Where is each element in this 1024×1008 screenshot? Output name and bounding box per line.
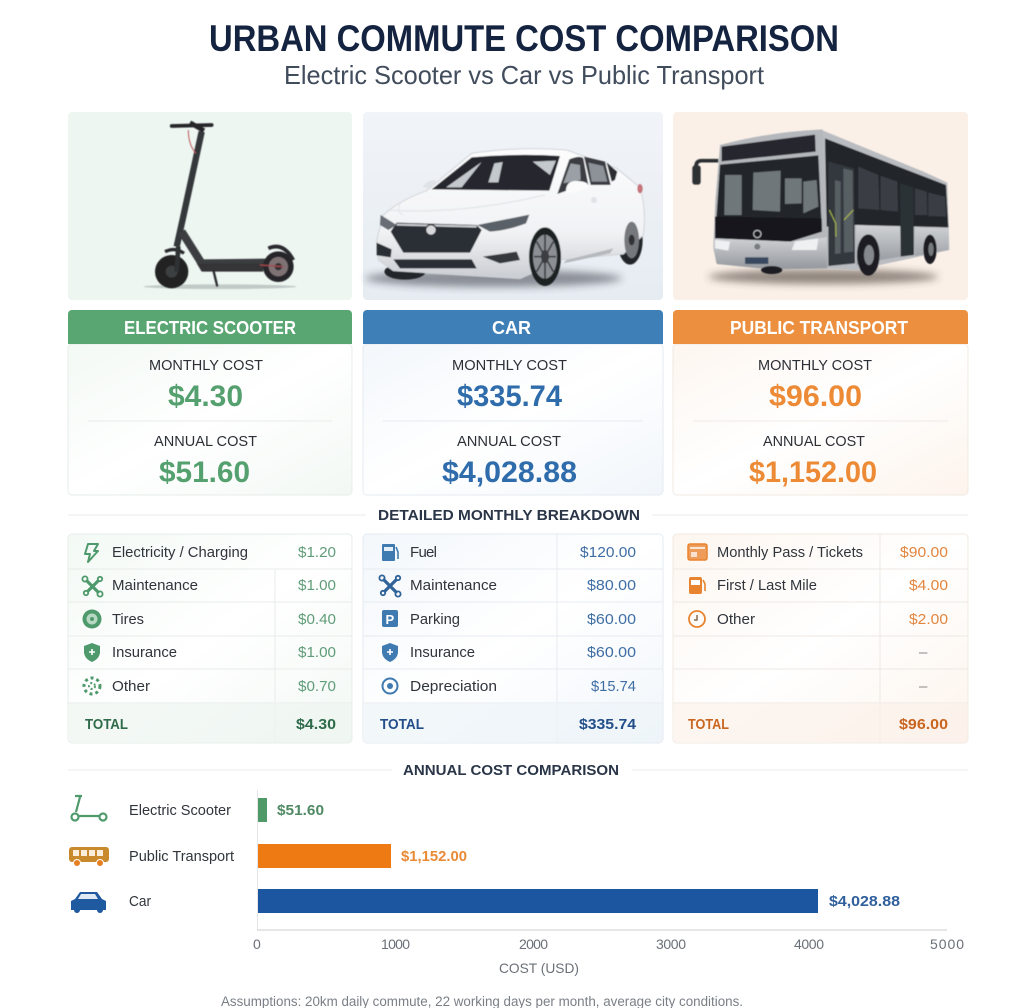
row: first last mile: First / Last Mile (717, 577, 817, 594)
bar: electric scooter (258, 798, 324, 822)
row: parking: $60.00 (587, 611, 636, 628)
car annual cost: ANNUAL COST (457, 433, 561, 450)
icon: tire (82, 610, 102, 628)
row: depreciation (410, 678, 636, 695)
scooter annual cost: $51.60 (159, 456, 250, 489)
scooter monthly cost: MONTHLY COST (149, 357, 263, 374)
row: electricity: $1.20 (298, 544, 336, 561)
row: maintenance: Maintenance (410, 577, 497, 594)
row: total (380, 717, 636, 733)
car annual cost (442, 433, 577, 489)
icon: fuel pump (382, 544, 398, 561)
panel: scooter photo (68, 112, 352, 300)
row: tires: Tires (112, 611, 144, 628)
car header: CAR (492, 318, 531, 338)
car annual cost: $4,028.88 (442, 456, 577, 489)
row: insurance (410, 644, 636, 661)
panel: scooter breakdown table (68, 534, 352, 743)
icon: car (71, 892, 106, 913)
row: total (688, 717, 948, 733)
bar: public transport (258, 844, 467, 868)
panel: car cost card (363, 310, 663, 495)
axis tick labels (253, 936, 964, 952)
subtitle: Electric Scooter vs Car vs Public Transport (284, 60, 765, 90)
label: electric scooter: Electric Scooter (129, 802, 231, 819)
public transport annual cost: ANNUAL COST (763, 433, 865, 450)
icon: clock (689, 611, 705, 627)
row: other: Other (112, 678, 150, 695)
row: fuel: $120.00 (580, 544, 636, 561)
icon: depreciation (382, 678, 398, 694)
icon: shield (84, 643, 100, 662)
row: first last mile (717, 577, 948, 594)
heading: annual cost comparison: ANNUAL COST COMPARISON (403, 763, 619, 779)
row: first last mile: $4.00 (909, 577, 948, 594)
scooter annual cost (154, 433, 257, 489)
icon: tools (379, 575, 401, 597)
axis tick labels: 2000 (519, 936, 548, 952)
car monthly cost (452, 357, 567, 413)
bus body (692, 129, 949, 276)
icon: shield (382, 643, 398, 662)
axis title: COST (USD) (499, 960, 579, 976)
row: insurance: Insurance (410, 644, 475, 661)
axis tick labels: 4000 (794, 936, 824, 952)
icon: scooter (72, 796, 106, 820)
panel: car breakdown table (363, 534, 663, 743)
row: maintenance: $80.00 (587, 577, 636, 594)
row: other: $0.70 (298, 678, 336, 695)
row: tires: $0.40 (298, 611, 336, 628)
axis tick labels: 0 (253, 936, 261, 952)
row: tires (112, 611, 336, 628)
row: other (717, 611, 948, 628)
panel: scooter cost card (68, 310, 352, 495)
public transport header (673, 310, 968, 344)
public transport annual cost (749, 433, 877, 489)
row: parking (410, 611, 636, 628)
row: total (85, 717, 336, 733)
public transport monthly cost: $96.00 (769, 380, 862, 413)
row: electricity: Electricity / Charging (112, 544, 248, 561)
bar: electric scooter: $51.60 (277, 803, 324, 819)
row: monthly pass (717, 544, 948, 561)
icon: bus (69, 847, 109, 866)
label: car: Car (129, 893, 151, 910)
icon: other (84, 678, 100, 694)
row: other (112, 678, 336, 695)
row: insurance: $1.00 (298, 644, 336, 661)
row: depreciation: $15.74 (591, 678, 636, 695)
row: maintenance (410, 577, 636, 594)
row: other: Other (717, 611, 755, 628)
panel: bus photo (673, 112, 968, 300)
scooter annual cost: ANNUAL COST (154, 433, 257, 450)
icon: pass (688, 544, 707, 560)
row: insurance: $60.00 (587, 644, 636, 661)
row: other: $2.00 (909, 611, 948, 628)
row: fuel: Fuel (410, 544, 437, 561)
icon: parking: P (386, 612, 394, 627)
bar: car (258, 889, 900, 913)
axis tick labels: 1000 (381, 936, 410, 952)
icon: lightning bolt (85, 544, 98, 562)
bar: public transport: $1,152.00 (401, 849, 467, 865)
axis tick labels: 3000 (656, 936, 686, 952)
public transport monthly cost: MONTHLY COST (758, 357, 872, 374)
row: total: $335.74 (579, 717, 636, 733)
title: URBAN COMMUTE COST COMPARISON (209, 18, 839, 59)
icon: tools (82, 576, 103, 597)
heading: detailed monthly breakdown: DETAILED MONTHLY BREAKDOWN (378, 508, 640, 524)
panel: car photo (363, 112, 663, 300)
car monthly cost: $335.74 (457, 380, 562, 413)
label: public transport: Public Transport (129, 848, 235, 865)
public transport header: PUBLIC TRANSPORT (730, 318, 908, 338)
panel: public transport breakdown table (673, 534, 968, 743)
icon: parking (382, 610, 398, 627)
scooter monthly cost: $4.30 (168, 380, 243, 413)
scooter header (68, 310, 352, 344)
public transport annual cost: $1,152.00 (749, 456, 877, 489)
scooter header: ELECTRIC SCOOTER (124, 318, 296, 338)
row: total: $4.30 (296, 717, 336, 733)
row: maintenance: Maintenance (112, 577, 198, 594)
car monthly cost: MONTHLY COST (452, 357, 567, 374)
row: depreciation: Depreciation (410, 678, 497, 695)
scooter shadow (143, 284, 297, 289)
row: insurance: Insurance (112, 644, 177, 661)
row: maintenance (112, 577, 336, 594)
row: parking: Parking (410, 611, 460, 628)
empty row dash: – (919, 644, 928, 661)
row: electricity (112, 544, 336, 561)
row: total: TOTAL (85, 717, 128, 733)
bar: car: $4,028.88 (829, 894, 900, 910)
row: monthly pass: $90.00 (900, 544, 948, 561)
public transport monthly cost (758, 357, 872, 413)
car body (377, 149, 644, 286)
axis tick labels: 5000 (930, 936, 964, 952)
empty row dash: – (919, 678, 928, 695)
row: monthly pass: Monthly Pass / Tickets (717, 544, 863, 561)
chart: annual cost bars (69, 790, 964, 976)
row: total: TOTAL (380, 717, 424, 733)
panel: public transport cost card (673, 310, 968, 495)
scooter body (155, 123, 294, 288)
row: fuel (410, 544, 636, 561)
row: maintenance: $1.00 (298, 577, 336, 594)
car shadow (365, 270, 622, 287)
scooter monthly cost (149, 357, 263, 413)
bus shadow (708, 269, 938, 284)
row: total: TOTAL (688, 717, 729, 733)
car header (363, 310, 663, 344)
row: insurance (112, 644, 336, 661)
row: total: $96.00 (899, 717, 948, 733)
icon: first last mile (689, 577, 705, 594)
